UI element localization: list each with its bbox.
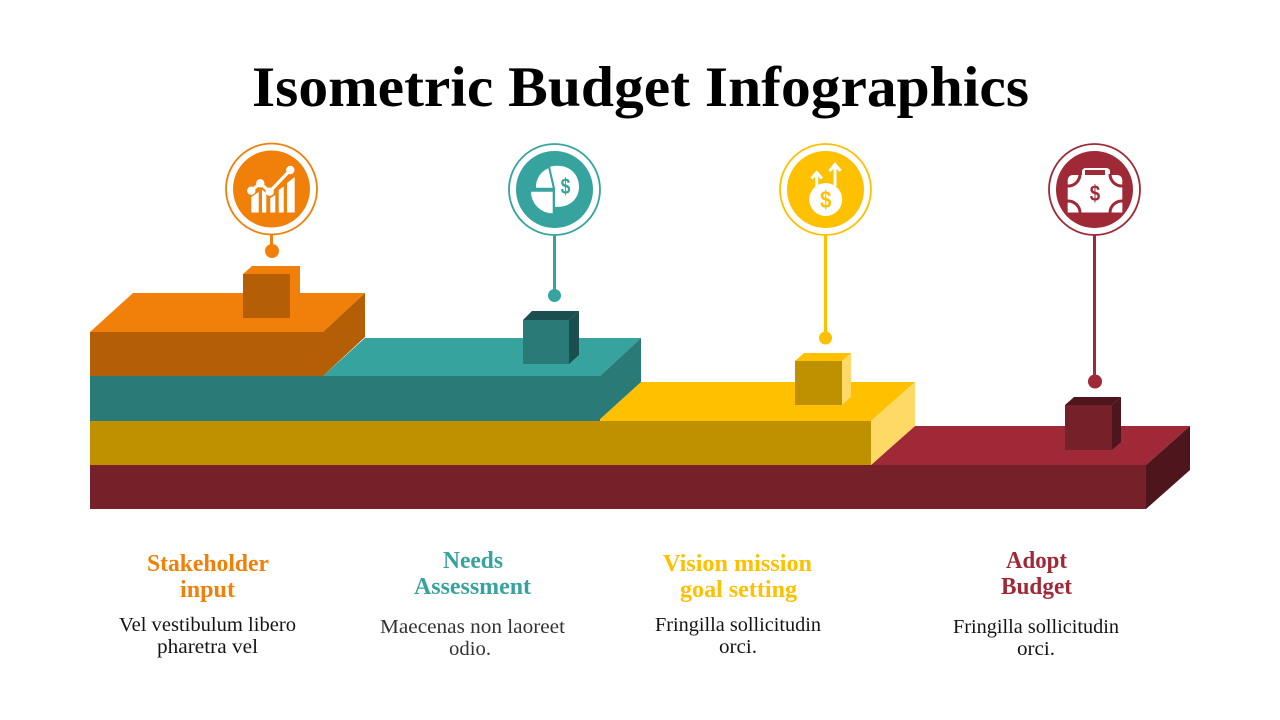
text block: adopt budget: orci. (1017, 638, 1055, 660)
text block: stakeholder input: input (180, 577, 235, 603)
icon: pie and dollar (531, 166, 579, 213)
text block: stakeholder input: Vel vestibulum libero (119, 614, 296, 636)
icon: coin with arrows: $ (820, 186, 832, 213)
title: Isometric Budget Infographics (252, 56, 1029, 119)
pin: maroon briefcase icon (1049, 144, 1140, 388)
icon: pie and dollar: $ (561, 175, 570, 200)
icon: briefcase with dollar: $ (1090, 183, 1101, 206)
step 1: orange (90, 293, 365, 376)
isometric stacked steps (90, 293, 1190, 509)
icon: briefcase with dollar (1067, 168, 1123, 213)
text block: stakeholder input: pharetra vel (157, 636, 258, 658)
pin: orange growth chart icon (226, 144, 317, 258)
text block: adopt budget (953, 548, 1119, 660)
step 2: teal (90, 338, 641, 421)
icon: coin with arrows (809, 164, 842, 216)
cube: maroon (1065, 397, 1121, 450)
text block: needs assessment: Needs (443, 548, 503, 574)
text block: vision mission goal setting: Fringilla sollicitudin (655, 614, 821, 636)
cube: teal (523, 311, 579, 364)
pin: teal pie chart icon (509, 144, 600, 302)
text block: stakeholder input: Stakeholder (147, 551, 269, 577)
text block: stakeholder input (119, 551, 296, 658)
icon: bars and trend line (247, 166, 295, 212)
step 3: yellow (90, 382, 915, 465)
text block: vision mission goal setting: Vision mission (663, 551, 812, 577)
text block: vision mission goal setting: orci. (719, 636, 757, 658)
text block: needs assessment: odio. (449, 638, 491, 660)
pin: yellow money growth icon (780, 144, 871, 344)
text block: adopt budget: Adopt (1006, 548, 1067, 574)
text block: needs assessment (380, 548, 565, 660)
text block: needs assessment: Assessment (414, 574, 531, 600)
cube: orange (243, 266, 300, 318)
text block: adopt budget: Budget (1001, 574, 1072, 600)
text block: vision mission goal setting: goal setting (680, 577, 797, 603)
text block: vision mission goal setting (655, 551, 821, 658)
cube: yellow (795, 353, 851, 405)
text block: adopt budget: Fringilla sollicitudin (953, 616, 1119, 638)
step 4: maroon (90, 426, 1190, 509)
text block: needs assessment: Maecenas non laoreet (380, 616, 565, 638)
